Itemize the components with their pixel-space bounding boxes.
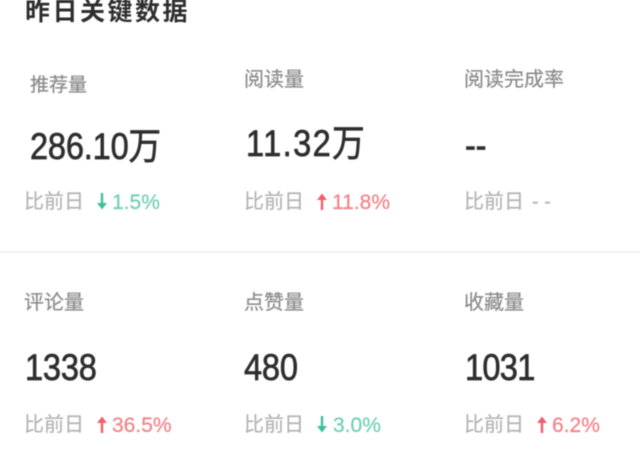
comparison label: read completion rate: 比前日 (464, 191, 524, 213)
label: recommendations: 推荐量 (30, 75, 87, 96)
comparison label: recommendations: 比前日 (24, 191, 84, 213)
label: read completion rate: 阅读完成率 (464, 69, 564, 91)
change: recommendations: 1.5% (112, 191, 160, 214)
value: recommendations: 286.10万 (30, 126, 161, 167)
comparison label: comments: 比前日 (24, 414, 84, 436)
icon: up arrow (96, 416, 108, 434)
label: comments: 评论量 (24, 292, 84, 314)
value: reads: 11.32万 (246, 123, 366, 164)
change: read completion rate: - - (532, 191, 551, 213)
change: favorites: 6.2% (552, 414, 600, 437)
icon: up arrow (536, 416, 548, 434)
label: favorites: 收藏量 (464, 292, 524, 314)
value: read completion rate: -- (465, 125, 486, 166)
icon: down arrow (316, 415, 328, 433)
change: reads: 11.8% (332, 191, 390, 214)
change: comments: 36.5% (112, 414, 172, 437)
icon: up arrow (316, 193, 328, 211)
comparison label: favorites: 比前日 (464, 414, 524, 436)
value: favorites: 1031 (465, 347, 535, 388)
value: likes: 480 (244, 347, 298, 388)
change: likes: 3.0% (333, 414, 381, 437)
label: likes: 点赞量 (244, 292, 304, 314)
value: comments: 1338 (25, 347, 97, 388)
comparison label: reads: 比前日 (244, 191, 304, 213)
comparison label: likes: 比前日 (244, 414, 304, 436)
icon: down arrow (96, 192, 108, 210)
label: reads: 阅读量 (244, 69, 304, 91)
